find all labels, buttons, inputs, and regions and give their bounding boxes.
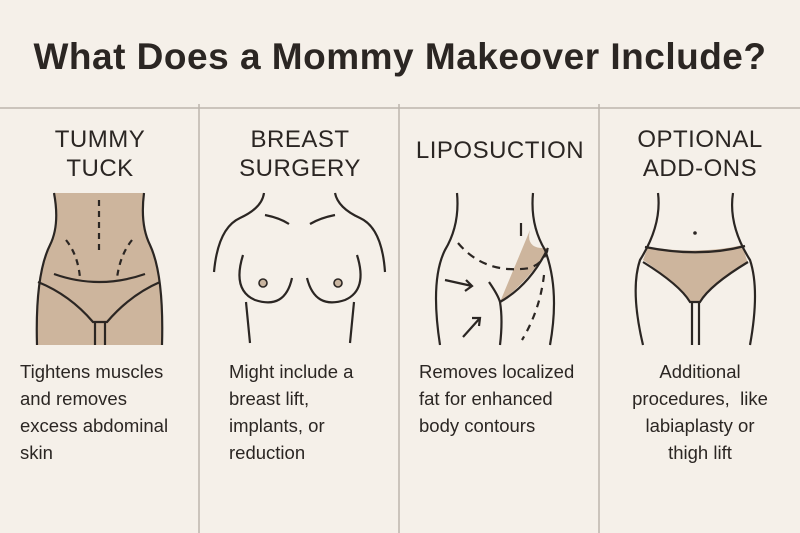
text: tummy tuck: Tightens muscles bbox=[20, 361, 163, 382]
icon: tummy tuck bbox=[37, 193, 162, 345]
text: tummy tuck: skin bbox=[20, 442, 53, 463]
heading: optional add-ons bbox=[637, 126, 763, 182]
text: breast surgery bbox=[229, 361, 354, 463]
text: optional add-ons bbox=[632, 361, 768, 463]
heading: optional add-ons: ADD-ONS bbox=[643, 155, 757, 182]
icon: optional add-ons bbox=[636, 193, 755, 345]
text: optional add-ons: thigh lift bbox=[668, 442, 732, 463]
icon: breasts bbox=[214, 193, 385, 343]
text: liposuction: fat for enhanced bbox=[419, 388, 553, 409]
text: breast surgery: reduction bbox=[229, 442, 305, 463]
text: breast surgery: Might include a bbox=[229, 361, 353, 382]
heading: optional add-ons: OPTIONAL bbox=[637, 126, 763, 153]
heading: tummy tuck bbox=[55, 126, 145, 182]
heading: breast surgery: SURGERY bbox=[239, 155, 361, 182]
heading: tummy tuck: TUCK bbox=[66, 155, 134, 182]
text: optional add-ons: Additional bbox=[659, 361, 741, 382]
text: tummy tuck: excess abdominal bbox=[20, 415, 168, 436]
text: optional add-ons: labiaplasty or bbox=[645, 415, 754, 436]
text: breast surgery: breast lift, bbox=[229, 388, 309, 409]
heading: breast surgery bbox=[239, 126, 361, 182]
text: liposuction: Removes localized bbox=[419, 361, 574, 382]
text: optional add-ons: procedures, like bbox=[632, 388, 768, 409]
heading: tummy tuck: TUMMY bbox=[55, 126, 145, 153]
heading: liposuction: LIPOSUCTION bbox=[416, 137, 584, 164]
text: tummy tuck bbox=[20, 361, 168, 463]
text: liposuction: body contours bbox=[419, 415, 535, 436]
title: What Does a Mommy Makeover Include? bbox=[33, 36, 766, 77]
text: breast surgery: implants, or bbox=[229, 415, 325, 436]
heading: breast surgery: BREAST bbox=[250, 126, 350, 153]
icon: liposuction bbox=[436, 193, 554, 345]
text: tummy tuck: and removes bbox=[20, 388, 127, 409]
text: liposuction bbox=[419, 361, 574, 436]
